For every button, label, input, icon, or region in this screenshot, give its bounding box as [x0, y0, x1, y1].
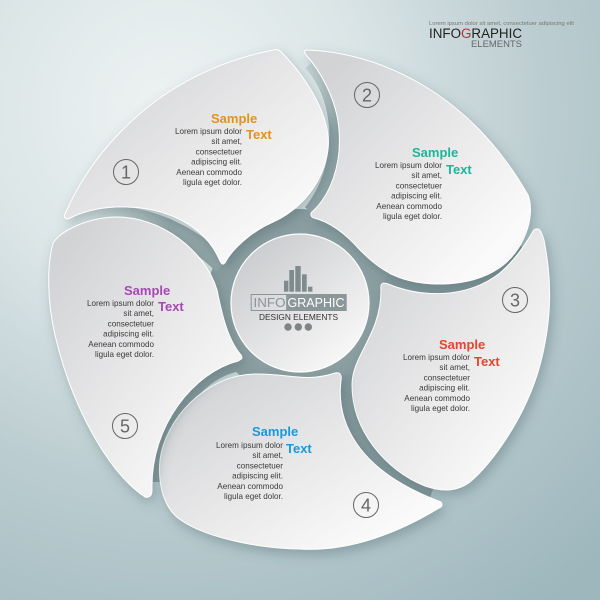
header subtitle: ELEMENTS — [471, 39, 522, 50]
petal 2 body text: adipiscing elit. — [391, 192, 442, 201]
petal 3 heading: Text — [474, 354, 500, 369]
petal 4 body text: sit amet, — [252, 451, 283, 460]
petal 1 body text: ligula eget dolor. — [183, 178, 242, 187]
petal 1 body text: adipiscing elit. — [191, 158, 242, 167]
petal 3 body text: ligula eget dolor. — [411, 404, 470, 413]
petal 5 shape — [49, 217, 242, 497]
petal 2 number — [354, 82, 380, 108]
petal 4 heading — [252, 424, 312, 456]
petal 2 heading — [412, 145, 472, 177]
petal 3 body text: Lorem ipsum dolor — [403, 353, 470, 362]
petal 5 number: 5 — [120, 416, 130, 436]
center disc — [231, 234, 369, 372]
petal 5 body text: Lorem ipsum dolor — [87, 299, 154, 308]
petal 3 body text — [403, 353, 470, 413]
petal 5 body text: consectetuer — [108, 319, 154, 328]
petal 5 heading: Text — [158, 299, 184, 314]
petal 4 body text: Lorem ipsum dolor — [216, 441, 283, 450]
petal 3 number: 3 — [510, 290, 520, 310]
panel: center circle — [231, 234, 369, 372]
petal 3 body text: consectetuer — [424, 373, 470, 382]
header caption: Lorem ipsum dolor sit amet, consectetuer adipiscing elit — [429, 21, 574, 27]
petal 1 shape — [64, 50, 328, 264]
petal 5 body text: adipiscing elit. — [103, 330, 154, 339]
header block — [429, 21, 574, 50]
panel: petal 2 — [305, 50, 530, 284]
petal 1 body text: Aenean commodo — [176, 168, 242, 177]
header title: INFOGRAPHIC — [429, 26, 522, 41]
petal 1 heading — [211, 111, 272, 142]
petal 1 body text: Lorem ipsum dolor — [175, 127, 242, 136]
petal 2 body text: consectetuer — [396, 181, 442, 190]
three dots — [284, 323, 312, 331]
panel: petal 1 — [64, 50, 328, 264]
panel: petal 3 — [352, 229, 550, 490]
petal 2 heading: Text — [446, 162, 472, 177]
infographic label box: GRAPHIC — [288, 295, 345, 310]
petal 2 body text: ligula eget dolor. — [383, 212, 442, 221]
icon: bar chart — [284, 266, 312, 292]
petal 4 heading: Sample — [252, 424, 298, 439]
petal 5 body text — [87, 299, 154, 359]
panel: petal 5 — [49, 217, 242, 497]
petal 3 body text: adipiscing elit. — [419, 384, 470, 393]
petal 1 heading: Text — [246, 127, 272, 142]
petal 5 body text: ligula eget dolor. — [95, 350, 154, 359]
petal 1 body text — [175, 127, 242, 187]
petal 1 number: 1 — [121, 162, 131, 182]
petal 5 number — [112, 414, 138, 438]
petal 4 body text: consectetuer — [237, 461, 283, 470]
petal 4 body text — [216, 441, 283, 501]
petal 2 heading: Sample — [412, 145, 458, 160]
gaps between petals — [75, 62, 524, 492]
petal 5 heading: Sample — [124, 283, 170, 298]
petal 2 body text: Aenean commodo — [376, 202, 442, 211]
petal 3 number — [502, 288, 528, 312]
petal 3 body text: sit amet, — [439, 363, 470, 372]
petal 5 heading — [124, 283, 184, 314]
petal 4 body text: ligula eget dolor. — [224, 492, 283, 501]
petal 4 body text: Aenean commodo — [217, 482, 283, 491]
petal 4 heading: Text — [286, 441, 312, 456]
petal 1 number — [114, 160, 138, 184]
petal 3 body text: Aenean commodo — [404, 394, 470, 403]
petal 1 body text: sit amet, — [211, 137, 242, 146]
petal 4 number — [354, 492, 378, 518]
petal 4 number: 4 — [361, 496, 371, 516]
panel: petal 4 — [160, 373, 442, 549]
petal 2 number: 2 — [362, 86, 372, 106]
petal 3 shape — [352, 229, 550, 490]
petal 1 heading: Sample — [211, 111, 257, 126]
infographic label box — [251, 294, 347, 311]
petal 2 shape — [305, 50, 530, 284]
petal 2 body text: sit amet, — [411, 171, 442, 180]
petal 1 body text: consectetuer — [196, 147, 242, 156]
petal 3 heading: Sample — [439, 337, 485, 352]
petal 5 body text: sit amet, — [123, 309, 154, 318]
petal 2 body text: Lorem ipsum dolor — [375, 161, 442, 170]
petal 2 body text — [375, 161, 442, 221]
petal 4 body text: adipiscing elit. — [232, 472, 283, 481]
petal 3 heading — [439, 337, 500, 369]
infographic label box: INFO — [254, 295, 286, 310]
petal 5 body text: Aenean commodo — [88, 340, 154, 349]
petal 4 shape — [160, 373, 442, 549]
design elements label: DESIGN ELEMENTS — [259, 312, 338, 322]
